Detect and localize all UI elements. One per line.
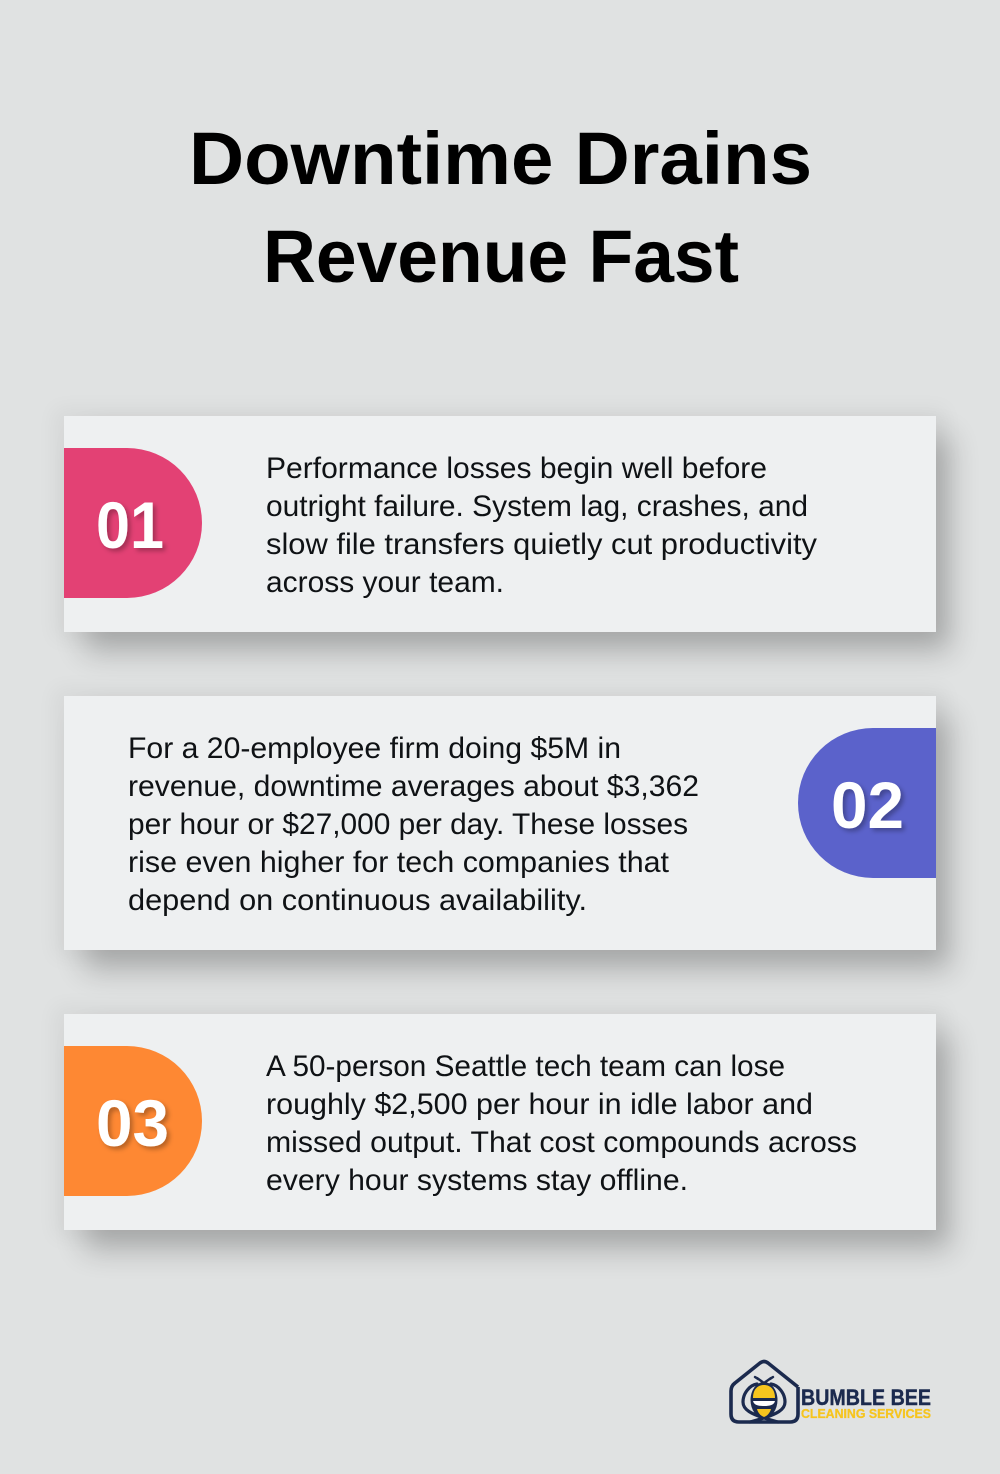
text: step 01 description: Performance losses begin well before [266, 452, 767, 485]
text: step 02 description: rise even higher for tech companies that [128, 846, 670, 879]
badge: 03 [64, 1046, 202, 1196]
text: step 02 description: revenue, downtime averages about $3,362 [128, 770, 699, 803]
title [189, 117, 812, 298]
icon: bee in house [731, 1362, 798, 1422]
text: step 03 description: roughly $2,500 per hour in idle labor and [266, 1088, 813, 1121]
title: Downtime Drains [189, 117, 812, 200]
text: step 03 description: A 50-person Seattle tech team can lose [266, 1050, 785, 1083]
text: step 01 description [266, 452, 817, 599]
text: step 03 description: every hour systems stay offline. [266, 1164, 688, 1197]
text: step 03 description [266, 1050, 857, 1197]
badge: 02 [798, 728, 936, 878]
text: step 02 description: For a 20-employee firm doing $5M in [128, 732, 621, 765]
panel: step 03 [54, 1006, 950, 1250]
logo text [801, 1385, 931, 1421]
badge: 01: 01 [96, 488, 164, 562]
panel: step 01 [54, 408, 950, 652]
text: step 01 description: outright failure. System lag, crashes, and [266, 490, 808, 523]
logo text: BUMBLE BEE [801, 1385, 931, 1410]
text: step 01 description: slow file transfers quietly cut productivity [266, 528, 817, 561]
text: step 02 description [128, 732, 699, 917]
title: Revenue Fast [263, 215, 739, 298]
badge: 03: 03 [96, 1086, 169, 1160]
badge: 02: 02 [831, 768, 904, 842]
badge: 01 [64, 448, 202, 598]
logo: Bumble Bee Cleaning Services [731, 1362, 931, 1422]
text: step 02 description: depend on continuous availability. [128, 884, 587, 917]
text: step 02 description: per hour or $27,000 per day. These losses [128, 808, 688, 841]
logo text: CLEANING SERVICES [801, 1406, 931, 1421]
panel: step 02 [54, 688, 950, 970]
text: step 03 description: missed output. That cost compounds across [266, 1126, 857, 1159]
text: step 01 description: across your team. [266, 566, 504, 599]
